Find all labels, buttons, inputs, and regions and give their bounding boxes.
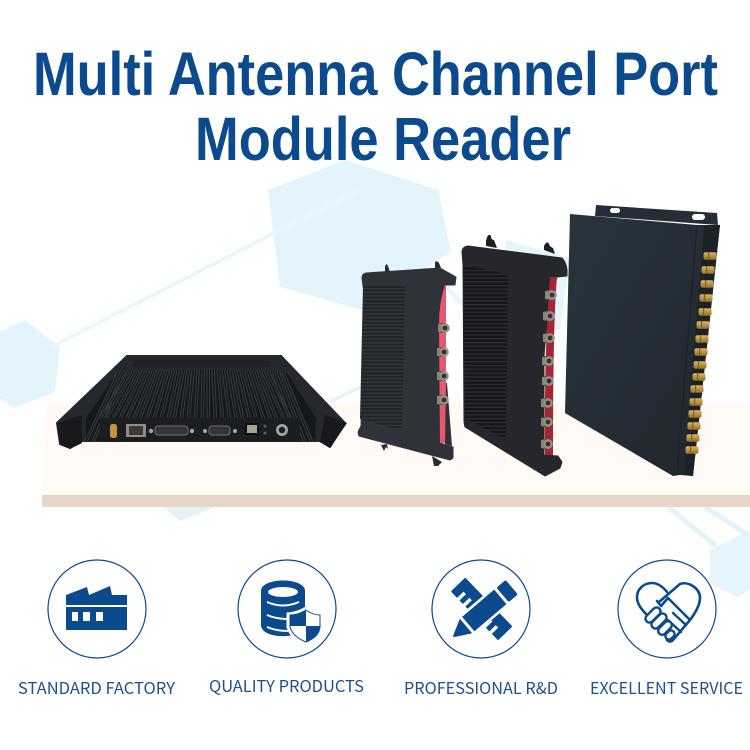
feature: excellent service [590,560,743,699]
feature: standard factory [18,560,176,699]
feature: quality products [209,560,364,697]
label: standard factory: STANDARD FACTORY [18,675,176,699]
device: 16-port reader [565,205,720,476]
title: Module Reader [195,105,571,173]
icon: handshake heart [618,560,716,658]
icon: database with shield [238,560,336,658]
device: 4-port reader [358,261,456,466]
feature: professional r&d [404,560,558,699]
device: 8-port reader [462,235,567,476]
label: quality products: QUALITY PRODUCTS [209,673,364,697]
label: professional r&d: PROFESSIONAL R&D [404,675,558,699]
background: hexagons and network lines [0,160,750,597]
floor panel [42,403,750,495]
icon: factory [48,560,146,658]
label: excellent service: EXCELLENT SERVICE [590,675,743,699]
icon: pencil and ruler [432,560,530,658]
floor edge bar [42,495,750,507]
title [33,40,718,173]
device: flat reader with ports [57,356,347,449]
